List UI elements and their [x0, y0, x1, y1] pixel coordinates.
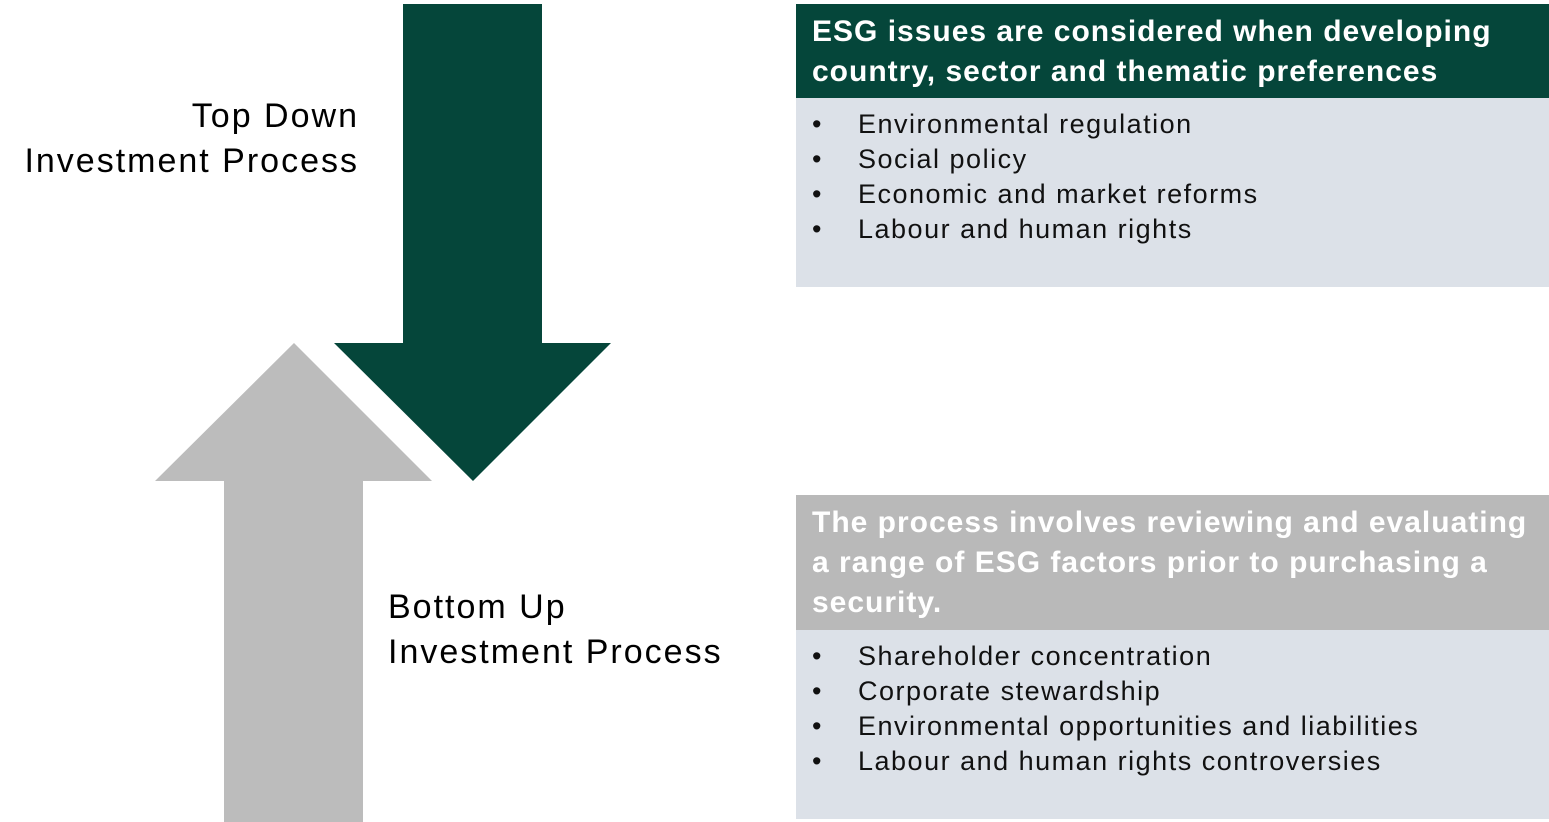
- bullet list: Environmental regulation: [858, 109, 1193, 139]
- panel: bottom up ESG: [796, 495, 1549, 819]
- panel header: ESG issues are considered when developing: [812, 15, 1492, 48]
- bullet list: Shareholder concentration: [858, 641, 1212, 671]
- bullet list: Environmental opportunities and liabilities: [858, 711, 1419, 741]
- bullet list: [796, 98, 1549, 287]
- panel header: The process involves reviewing and evaluating: [812, 506, 1527, 539]
- label: bottom up: [388, 588, 723, 671]
- label: top down: Top Down: [192, 97, 359, 135]
- label: top down: Investment Process: [24, 142, 359, 180]
- panel header: [796, 4, 1549, 98]
- bullet list: Social policy: [858, 144, 1028, 174]
- panel: top down ESG: [796, 4, 1549, 287]
- label: bottom up: Bottom Up: [388, 588, 567, 626]
- bullet list: Corporate stewardship: [858, 676, 1161, 706]
- panel header: security.: [812, 586, 942, 619]
- label: bottom up: Investment Process: [388, 633, 723, 671]
- panel header: country, sector and thematic preferences: [812, 55, 1438, 88]
- panel header: [796, 495, 1549, 630]
- bullet list: Economic and market reforms: [858, 179, 1259, 209]
- bullet list: Labour and human rights: [858, 214, 1193, 244]
- panel header: a range of ESG factors prior to purchasing a: [812, 546, 1488, 579]
- label: top down: [24, 97, 359, 180]
- bullet list: Labour and human rights controversies: [858, 746, 1382, 776]
- bullet list: [796, 630, 1549, 819]
